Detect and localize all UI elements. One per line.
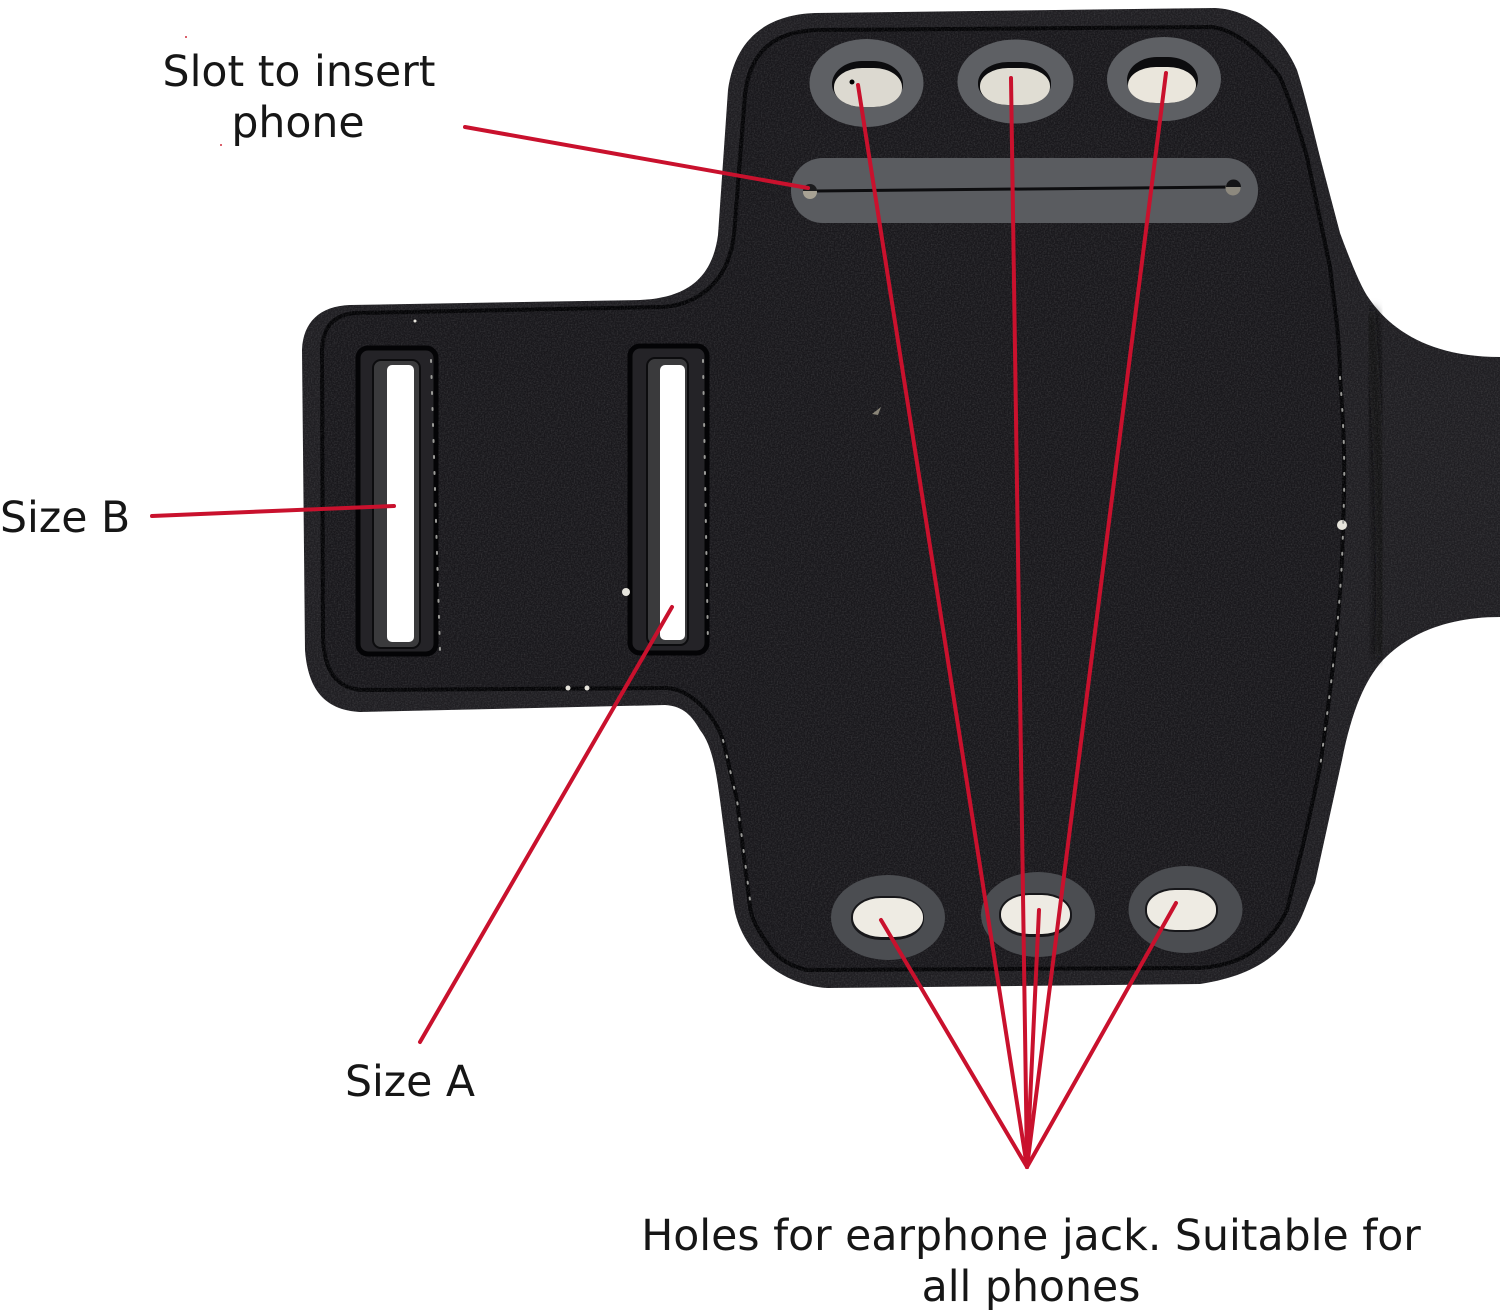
inner panel with stitching <box>322 27 1344 970</box>
white specks <box>414 320 1347 690</box>
fabric texture <box>300 0 1500 1000</box>
stray red specks <box>185 36 222 146</box>
phone slot <box>791 158 1258 223</box>
label: size A: Size A <box>345 1057 475 1107</box>
label: slot to insert phone: Slot to insert <box>163 47 435 97</box>
arrow lines: red callouts <box>152 73 1176 1167</box>
stitch dots <box>431 360 1344 900</box>
label: slot to insert phone: phone <box>231 98 365 148</box>
armband body <box>300 0 1500 1000</box>
label: size B: Size B <box>0 493 130 543</box>
label: holes for earphone jack: all phones <box>922 1262 1140 1312</box>
armband outline and strap <box>302 8 1500 988</box>
bottom earphone holes <box>831 866 1242 960</box>
strap slot size B <box>358 348 436 654</box>
top earphone holes <box>810 37 1221 127</box>
strap fold shadow <box>1370 310 1381 657</box>
label: holes for earphone jack <box>641 1211 1421 1312</box>
label: slot to insert phone <box>163 47 435 148</box>
strap slot size A <box>630 346 707 653</box>
label: holes for earphone jack: Holes for earphone jack. Suitable for <box>641 1211 1421 1261</box>
